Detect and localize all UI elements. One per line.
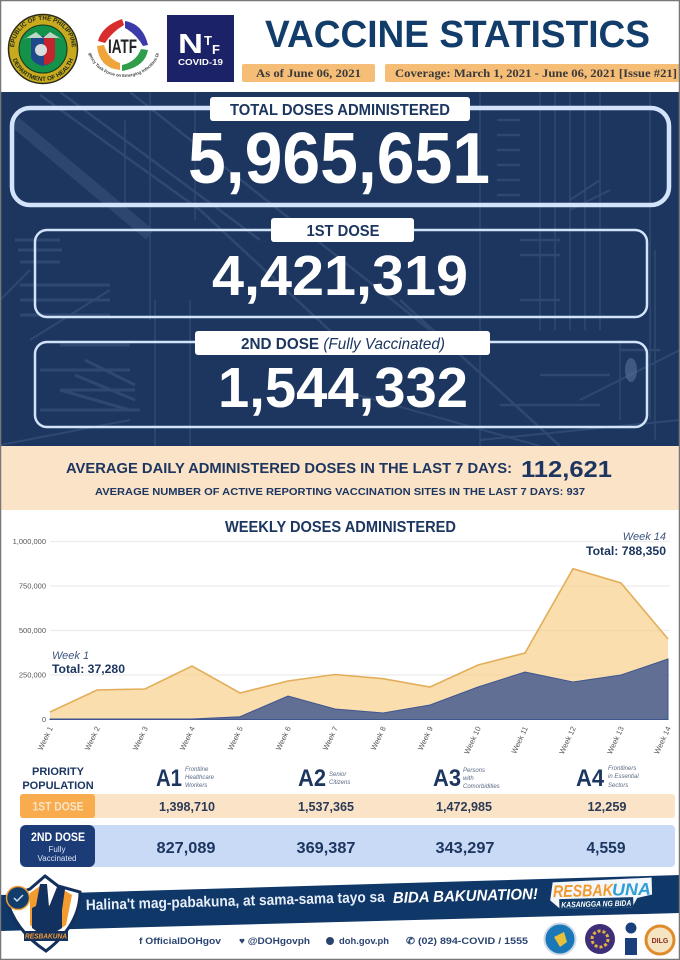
row: second dose: 369,387 — [296, 840, 356, 857]
row: second dose — [20, 825, 675, 867]
agency logos: DILG — [652, 938, 669, 945]
second dose label: 2ND DOSE (Fully Vaccinated) — [241, 336, 445, 353]
chart: weekly doses: Week 11 — [509, 725, 530, 755]
icon: Resbakuna shield: RESBAKUNA — [25, 932, 67, 940]
chart: weekly doses: Week 2 — [83, 725, 102, 752]
icon: DOH seal: DEPARTMENT OF HEALTH — [12, 58, 74, 81]
chart: weekly doses: 500,000 — [19, 626, 46, 635]
first dose box — [35, 218, 647, 317]
callout: week 14 — [586, 531, 666, 558]
second dose area — [50, 659, 668, 720]
row: second dose: 343,297 — [436, 840, 495, 857]
footer contacts: f OfficialDOHgov — [139, 936, 222, 947]
group A3: with — [463, 776, 474, 782]
total doses label — [210, 97, 470, 121]
table: priority population — [20, 765, 675, 867]
banner slogan: BIDA BAKUNATION! — [393, 886, 538, 907]
group A4 — [576, 765, 639, 792]
group A4: Sectors — [608, 783, 628, 789]
footer contacts: doh.gov.ph — [339, 936, 389, 947]
footer contacts: ♥ @DOHgovph — [239, 936, 310, 947]
date chip — [242, 64, 375, 82]
row: first dose: 1,398,710 — [159, 799, 215, 814]
average daily value: 112,621 — [521, 456, 612, 482]
group A4: A4 — [576, 765, 605, 792]
total doses value: 5,965,651 — [188, 119, 490, 199]
coverage chip: Coverage: March 1, 2021 - June 06, 2021 [Issue #21] — [395, 66, 677, 80]
callout: week 1: Week 1 — [52, 650, 89, 662]
agency logos — [544, 922, 674, 955]
title: VACCINE STATISTICS — [265, 14, 650, 56]
chart: weekly doses: 1,000,000 — [13, 537, 46, 546]
icon: DOH seal — [8, 14, 78, 84]
group A1 — [156, 765, 215, 792]
second dose chip — [20, 825, 95, 867]
chart: weekly doses: Week 9 — [416, 725, 435, 752]
group A1: Healthcare — [185, 775, 215, 781]
group A4: in Essential — [608, 774, 639, 780]
callout: week 14: Week 14 — [623, 531, 666, 543]
chart: weekly doses: Week 7 — [321, 725, 340, 752]
group A2: Senior — [329, 772, 347, 778]
priority population heading: PRIORITY — [32, 766, 85, 778]
chart: weekly doses: Week 12 — [557, 725, 578, 756]
second dose chip: 2ND DOSE — [31, 832, 85, 844]
icon: Resbakuna logo: UNA — [612, 880, 651, 900]
group A3 — [433, 765, 500, 792]
active sites: AVERAGE NUMBER OF ACTIVE REPORTING VACCINATION SITES IN THE LAST 7 DAYS: 937 — [95, 486, 585, 498]
footer contacts — [139, 936, 529, 947]
chart: weekly doses: 0 — [42, 715, 46, 724]
chart: weekly doses: 750,000 — [19, 582, 46, 590]
first dose chip: 1ST DOSE — [32, 800, 84, 814]
row: first dose: 1,537,365 — [298, 799, 354, 814]
row: first dose: 1,472,985 — [436, 799, 492, 814]
second dose label — [195, 331, 490, 355]
header — [8, 14, 679, 84]
group A3: A3 — [433, 765, 461, 792]
row: first dose — [20, 794, 675, 818]
second dose chip: Fully — [49, 845, 65, 854]
group A1: Workers — [185, 783, 207, 789]
icon: Resbakuna shield — [6, 876, 80, 951]
icon: NTF logo: COVID-19 — [178, 57, 223, 67]
panel: daily averages — [0, 446, 680, 510]
callout: week 14: Total: 788,350 — [586, 544, 666, 558]
average daily doses: AVERAGE DAILY ADMINISTERED DOSES IN THE LAST 7 DAYS: — [66, 460, 512, 477]
group A4: Frontliners — [608, 766, 636, 772]
icon: NTF logo — [167, 15, 234, 82]
first dose label — [271, 218, 414, 242]
total doses box — [12, 97, 669, 205]
group A1: A1 — [156, 765, 182, 792]
second dose box — [35, 331, 647, 427]
group A3: Persons — [463, 768, 485, 774]
icon: NTF logo: T — [204, 33, 212, 48]
chart: weekly doses: Week 13 — [605, 725, 626, 756]
date chip: As of June 06, 2021 — [256, 66, 361, 80]
first dose value: 4,421,319 — [212, 244, 468, 308]
chart: weekly doses: Week 5 — [226, 725, 245, 752]
chart title: WEEKLY DOSES ADMINISTERED — [225, 519, 456, 536]
callout: week 1 — [52, 650, 125, 676]
group A3: Comorbidities — [463, 784, 500, 790]
second dose value: 1,544,332 — [218, 356, 468, 420]
chart: weekly doses: 250,000 — [19, 670, 46, 680]
banner message: Halina't mag-pabakuna, at sama-sama tayo sa — [86, 889, 386, 914]
icon: NTF logo: N — [178, 28, 203, 59]
chart: weekly doses: Week 14 — [652, 725, 673, 756]
chart: weekly doses: Week 3 — [131, 725, 150, 752]
first dose chip — [20, 794, 95, 818]
icon: IATF logo — [88, 19, 159, 77]
first dose label: 1ST DOSE — [306, 223, 380, 240]
row: second dose: 827,089 — [156, 840, 216, 857]
chart: weekly doses: Week 4 — [178, 725, 197, 752]
first dose area — [50, 569, 668, 720]
second dose chip: Vaccinated — [38, 854, 76, 863]
icon: IATF logo: IATF — [108, 37, 137, 58]
row: second dose: 4,559 — [586, 840, 626, 857]
row: first dose: 12,259 — [588, 799, 626, 814]
callout: week 1: Total: 37,280 — [52, 662, 125, 676]
total doses label: TOTAL DOSES ADMINISTERED — [230, 102, 450, 119]
priority population heading — [22, 766, 94, 792]
icon: NTF logo: F — [212, 42, 220, 57]
chart: weekly doses: Week 6 — [274, 725, 293, 752]
group A2: A2 — [298, 765, 326, 792]
chart: weekly doses — [13, 519, 673, 756]
banner — [0, 875, 680, 951]
icon: Resbakuna logo: KASANGGA NG BIDA — [561, 899, 632, 910]
chart: weekly doses: Week 8 — [369, 725, 388, 752]
chart: weekly doses: Week 1 — [36, 725, 55, 752]
chart: weekly doses: Week 10 — [462, 725, 483, 756]
group A2: Citizens — [329, 780, 350, 786]
footer contacts: ✆ (02) 894-COVID / 1555 — [406, 936, 529, 947]
icon: Resbakuna logo: RESBAK — [553, 881, 615, 901]
panel: dose totals — [0, 92, 680, 446]
group A2 — [298, 765, 350, 792]
group A1: Frontline — [185, 767, 209, 773]
priority population heading: POPULATION — [22, 780, 94, 792]
icon: Resbakuna logo — [550, 878, 652, 910]
